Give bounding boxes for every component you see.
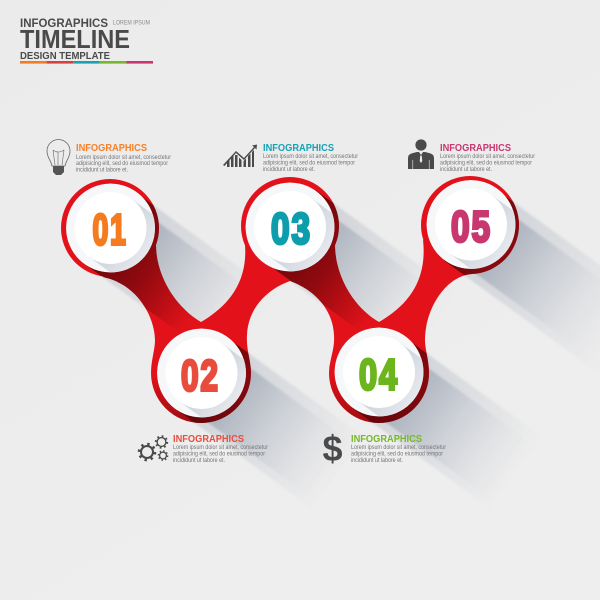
text block 04: [351, 434, 446, 464]
icon: gears: [139, 436, 168, 460]
node 05: 05: [451, 203, 492, 252]
title block: [20, 16, 153, 64]
node 03: 03: [271, 205, 312, 254]
text block 02: adipisicing elit, sed do eiusmod tempor: [173, 452, 265, 458]
icon: business person: [408, 139, 434, 169]
title block: TIMELINE: [20, 26, 130, 54]
title block: INFOGRAPHICS: [20, 16, 108, 30]
text block 04: adipisicing elit, sed do eiusmod tempor: [351, 452, 443, 458]
node 02: 02: [181, 351, 220, 401]
text block 02: [173, 434, 268, 464]
text block 03: [263, 143, 358, 173]
text block 02: incididunt ut labore et.: [173, 458, 225, 464]
text block 05: [440, 143, 535, 173]
title block: DESIGN TEMPLATE: [20, 50, 110, 62]
text block 05: INFOGRAPHICS: [440, 143, 511, 154]
text block 01: [76, 143, 171, 174]
text block 01: INFOGRAPHICS: [76, 143, 147, 154]
node 03: [246, 182, 334, 272]
node 04: 04: [359, 351, 399, 400]
text block 01: incididunt ut labore et.: [76, 168, 128, 174]
text block 02: Lorem ipsum dolor sit amet, consectetur: [173, 445, 268, 451]
node 05: [426, 180, 516, 269]
node 04: [334, 328, 424, 416]
text block 05: incididunt ut labore et.: [440, 167, 492, 173]
text block 03: Lorem ipsum dolor sit amet, consectetur: [263, 154, 358, 160]
text block 01: adipisicing elit, sed do eiusmod tempor: [76, 161, 168, 167]
text block 03: incididunt ut labore et.: [263, 167, 315, 173]
red timeline ribbon: [61, 176, 519, 423]
text block 04: INFOGRAPHICS: [351, 434, 422, 445]
node 01: [66, 184, 155, 272]
node 01: 01: [92, 204, 128, 254]
text block 04: incididunt ut labore et.: [351, 458, 403, 464]
text block 04: Lorem ipsum dolor sit amet, consectetur: [351, 445, 446, 451]
text block 01: Lorem ipsum dolor sit amet, consectetur: [76, 155, 171, 161]
icon: growth chart: [223, 144, 257, 167]
node 02: [157, 328, 246, 418]
icon: light bulb: [47, 140, 70, 175]
text block 02: INFOGRAPHICS: [173, 434, 244, 445]
title block: LOREM IPSUM: [113, 20, 150, 26]
icon: dollar sign: $: [322, 428, 343, 469]
long shadows: [84, 189, 600, 509]
text block 05: adipisicing elit, sed do eiusmod tempor: [440, 160, 532, 166]
text block 05: Lorem ipsum dolor sit amet, consectetur: [440, 154, 535, 160]
text block 03: adipisicing elit, sed do eiusmod tempor: [263, 160, 355, 166]
text block 03: INFOGRAPHICS: [263, 143, 334, 154]
